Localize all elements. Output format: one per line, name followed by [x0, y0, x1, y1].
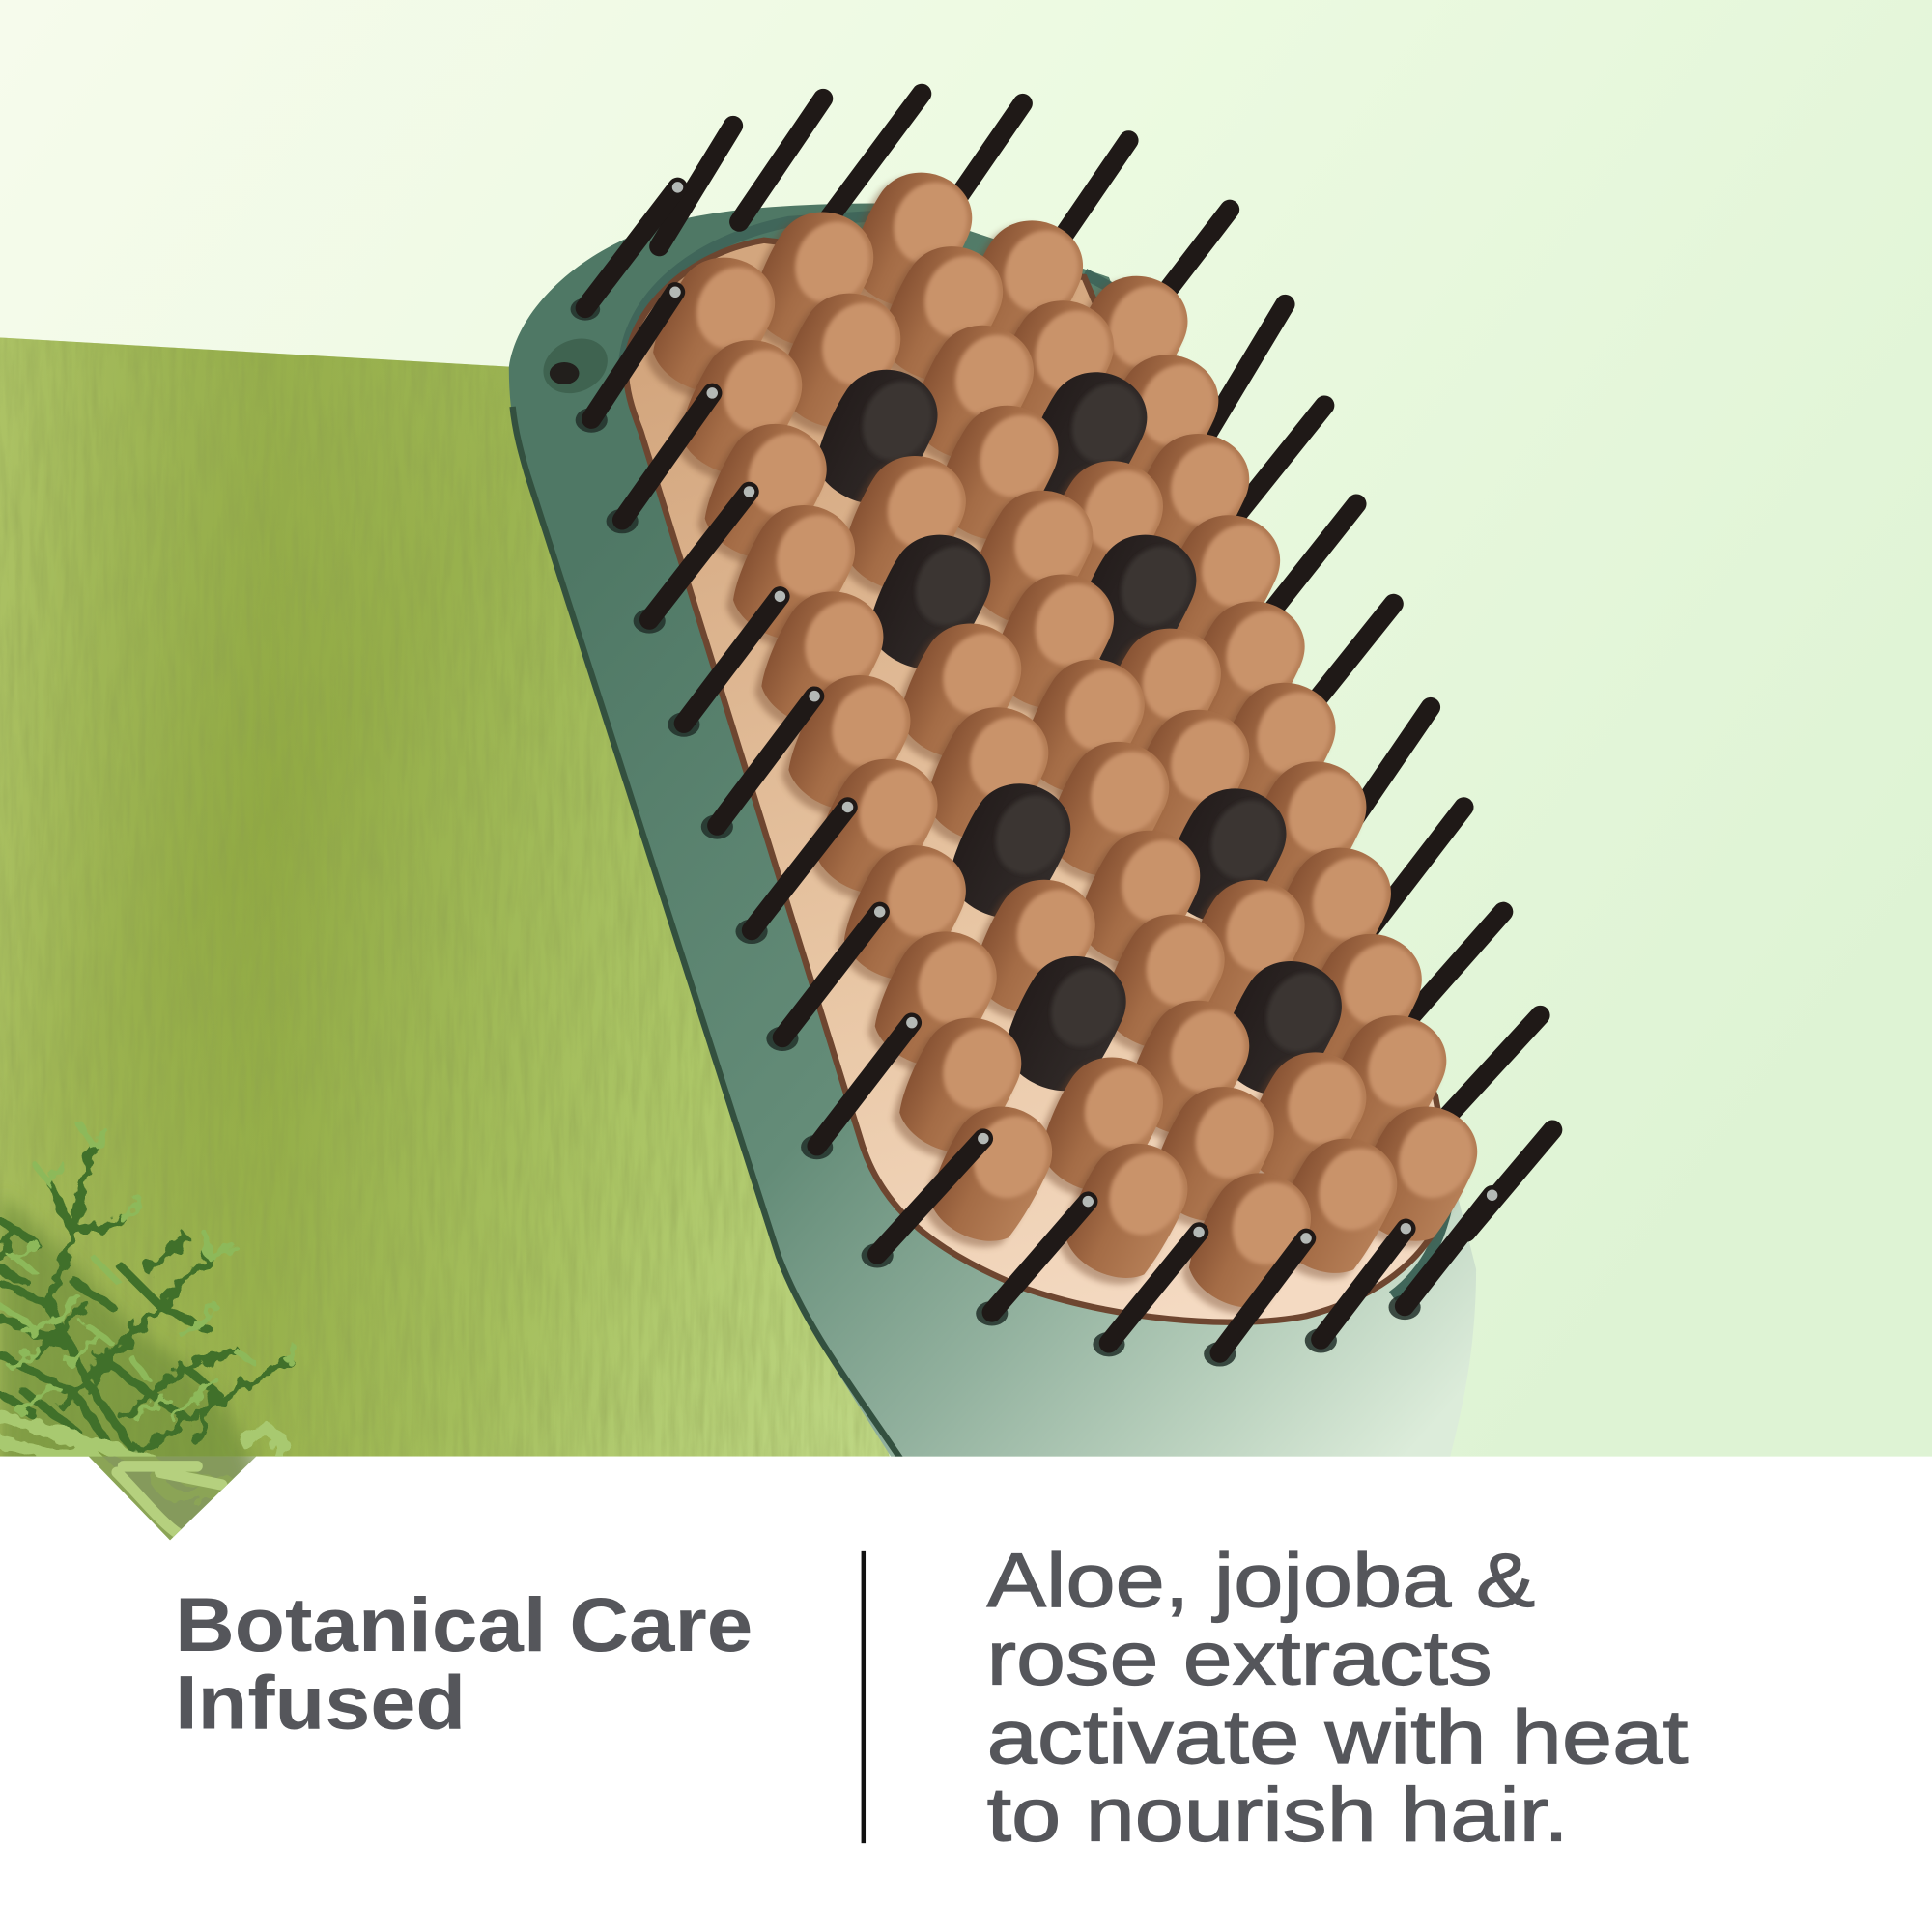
copper plate	[626, 241, 1452, 1322]
green inner rim	[623, 212, 1452, 1296]
description text	[987, 1537, 1688, 1858]
hole in head	[543, 338, 608, 393]
body dark left rim	[513, 407, 906, 1466]
textured green wall	[0, 332, 899, 1540]
pin base holes	[571, 298, 1421, 1367]
moss sprig	[0, 1123, 296, 1552]
front pins	[585, 187, 1552, 1353]
description line 3: activate with heat	[987, 1693, 1688, 1779]
description line 2: rose extracts	[987, 1615, 1492, 1701]
moss light twigs	[0, 1123, 296, 1417]
hair brush	[509, 94, 1552, 1466]
description line 4: to nourish hair.	[987, 1772, 1569, 1858]
moss dark branches	[0, 1146, 290, 1454]
back pins	[659, 94, 1540, 1136]
copper and ceramic prongs	[634, 154, 1492, 1330]
heading line 1: Botanical Care	[175, 1581, 753, 1667]
moss thick pale stem	[0, 1417, 296, 1534]
brush body and handle	[509, 203, 1476, 1466]
heading line 2: Infused	[175, 1660, 466, 1746]
description line 1: Aloe, jojoba &	[987, 1537, 1535, 1623]
moss shade in pointer	[89, 1457, 256, 1540]
moss soft mass	[0, 1195, 252, 1552]
heading	[175, 1581, 753, 1746]
pin tips	[669, 182, 1497, 1244]
pale stems in pointer	[117, 1466, 222, 1534]
vertical divider	[862, 1551, 866, 1843]
